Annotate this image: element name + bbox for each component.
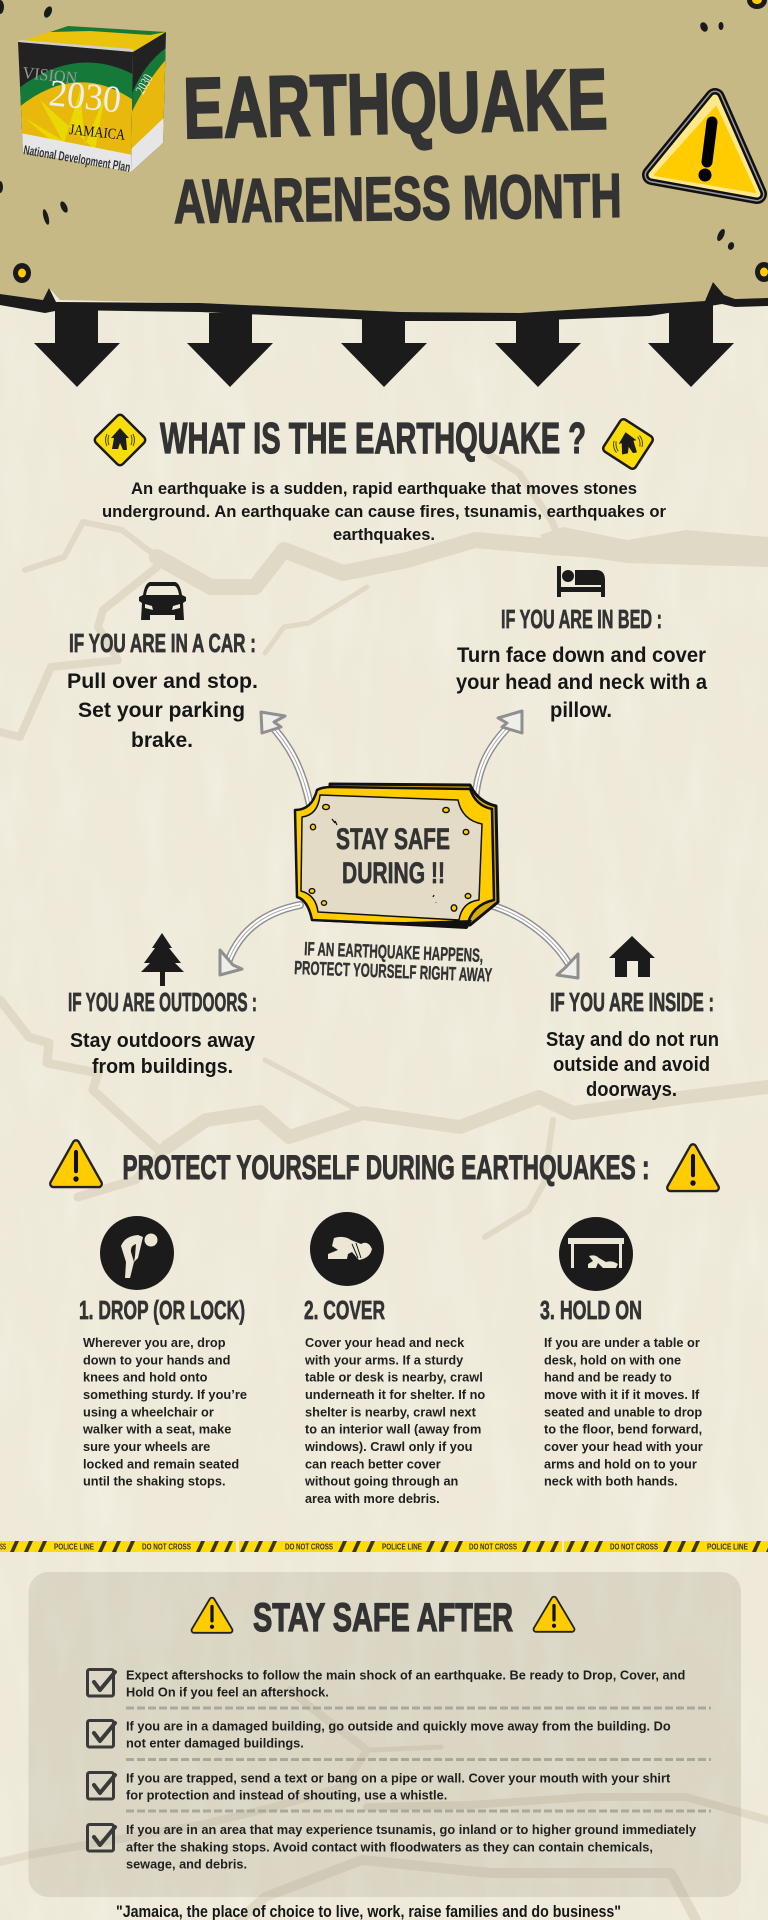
panel: outdoors <box>68 933 257 1078</box>
panel: step 1 drop: locked and remain seated <box>83 1456 239 1471</box>
icon: warning right <box>536 1599 572 1629</box>
panel: step 3 hold on <box>540 1217 703 1489</box>
panel: in a car <box>67 582 258 752</box>
police tape: DO NOT CROSS <box>610 1542 659 1552</box>
icon: warning left <box>53 1144 99 1184</box>
panel: step 1 drop: until the shaking stops. <box>83 1474 226 1489</box>
intro paragraph <box>102 480 667 544</box>
panel: step 3 hold on: 3. HOLD ON <box>540 1295 642 1325</box>
caption under sign <box>294 939 493 987</box>
panel: step 2 cover: windows). Crawl only if you <box>304 1439 472 1454</box>
Vision 2030 Jamaica logo cube: 2030 <box>133 72 156 97</box>
panel: step 2 cover: area with more debris. <box>305 1491 440 1506</box>
sign: stay safe during <box>295 784 498 929</box>
checklist: sewage, and debris. <box>126 1857 247 1872</box>
panel: step 2 cover: with your arms. If a sturdy <box>304 1352 464 1367</box>
police tape: POLICE LINE <box>54 1542 95 1552</box>
police tape: POLICE LINE <box>707 1542 749 1552</box>
checklist: If you are in an area that may experience tsunamis, go inland or to higher ground immediately <box>126 1822 697 1837</box>
police tape: POLICE LINE <box>382 1542 423 1552</box>
icon: car <box>139 582 186 620</box>
panel: in bed: IF YOU ARE IN BED : <box>501 604 662 634</box>
caption under sign: PROTECT YOURSELF RIGHT AWAY <box>294 958 493 987</box>
checklist: If you are in a damaged building, go outside and quickly move away from the building. Do <box>126 1718 671 1733</box>
title <box>173 51 622 237</box>
panel: step 3 hold on: move with it if it moves. If <box>544 1387 700 1402</box>
heading: stay safe after: STAY SAFE AFTER <box>253 1596 513 1640</box>
panel: in a car: IF YOU ARE IN A CAR : <box>69 628 256 658</box>
panel: step 1 drop: 1. DROP (OR LOCK) <box>79 1295 245 1325</box>
panel: step 1 drop: knees and hold onto <box>83 1370 207 1385</box>
panel: step 3 hold on: arms and hold on to your <box>544 1456 697 1471</box>
panel: step 1 drop: using a wheelchair or <box>83 1404 214 1419</box>
panel: step 3 hold on: neck with both hands. <box>544 1474 678 1489</box>
checklist: Expect aftershocks to follow the main shock of an earthquake. Be ready to Drop, Cover, and <box>126 1667 685 1682</box>
icon: shaking house sign right <box>596 412 660 476</box>
Vision 2030 Jamaica logo cube: VISION <box>22 63 78 88</box>
checklist: not enter damaged buildings. <box>126 1736 304 1751</box>
panel: step 1 drop: walker with a seat, make <box>82 1422 231 1437</box>
panel: inside: Stay and do not run <box>546 1029 719 1051</box>
panel: step 2 cover: can reach better cover <box>305 1456 441 1471</box>
panel: in bed <box>456 566 707 722</box>
panel: step 2 cover: underneath it for shelter. If no <box>305 1387 485 1402</box>
panel: step 1 drop: sure your wheels are <box>83 1439 210 1454</box>
Vision 2030 Jamaica logo cube: JAMAICA <box>69 122 126 144</box>
panel: outdoors: IF YOU ARE OUTDOORS : <box>68 987 257 1017</box>
icon: drop <box>100 1216 174 1290</box>
icon: hold on <box>559 1217 633 1291</box>
intro paragraph: An earthquake is a sudden, rapid earthquake that moves stones <box>131 480 637 498</box>
torn black edge of banner <box>0 282 768 321</box>
panel: in a car: brake. <box>131 729 193 752</box>
panel: step 3 hold on: hand and be ready to <box>544 1370 672 1385</box>
banner specks and rivets <box>0 0 768 283</box>
arrow: down left <box>220 905 300 975</box>
panel: in bed: Turn face down and cover <box>457 644 706 667</box>
panel: in a car: Pull over and stop. <box>67 670 258 693</box>
police tape: DO NOT CROSS <box>285 1542 334 1552</box>
panel: outdoors: from buildings. <box>92 1056 233 1078</box>
icon: cover <box>310 1212 384 1286</box>
icon: big warning sign <box>652 98 757 194</box>
checklist: If you are trapped, send a text or bang on a pipe or wall. Cover your mouth with your shirt <box>126 1770 671 1785</box>
header banner <box>0 0 768 321</box>
icon: warning right <box>670 1148 716 1188</box>
panel: step 3 hold on: seated and unable to drop <box>544 1404 702 1419</box>
panel: inside: doorways. <box>586 1079 677 1101</box>
panel: step 2 cover: Cover your head and neck <box>305 1335 465 1350</box>
panel: step 1 drop: Wherever you are, drop <box>83 1335 226 1350</box>
panel: step 2 cover: without going through an <box>304 1474 458 1489</box>
arrow: up left <box>261 712 310 805</box>
police tape: DO NOT CROSS <box>142 1542 192 1552</box>
icon: warning left <box>194 1600 230 1630</box>
checklist: after the shaking stops. Avoid contact with floodwaters as they can contain chemicals, <box>126 1839 653 1854</box>
panel: step 3 hold on: desk, hold on with one <box>544 1352 681 1367</box>
panel: step 1 drop: something sturdy. If you’re <box>83 1387 247 1402</box>
arrow: down right <box>490 905 578 978</box>
caption under sign: IF AN EARTHQUAKE HAPPENS, <box>304 939 483 967</box>
police tape <box>0 1541 768 1552</box>
panel: step 3 hold on: cover your head with your <box>544 1439 703 1454</box>
panel: outdoors: Stay outdoors away <box>70 1030 256 1052</box>
sign: stay safe during: DURING !! <box>342 857 445 890</box>
panel: in bed: your head and neck with a <box>456 671 707 694</box>
panel: inside <box>546 936 719 1101</box>
panel: step 2 cover <box>304 1212 485 1506</box>
panel: inside: outside and avoid <box>553 1054 710 1076</box>
panel: step 1 drop: down to your hands and <box>83 1352 230 1367</box>
panel: step 3 hold on: to the floor, bend forward, <box>544 1422 702 1437</box>
panel: step 3 hold on: If you are under a table or <box>544 1335 700 1350</box>
checklist: Hold On if you feel an aftershock. <box>126 1685 329 1700</box>
panel: in bed: pillow. <box>550 699 612 722</box>
police tape: DO NOT CROSS <box>469 1542 518 1552</box>
intro paragraph: underground. An earthquake can cause fires, tsunamis, earthquakes or <box>102 503 667 521</box>
panel: step 2 cover: to an interior wall (away from <box>305 1422 481 1437</box>
arrow: up right <box>475 711 522 800</box>
icon: bed <box>557 566 605 597</box>
panel: step 1 drop <box>79 1216 247 1489</box>
background cracks <box>0 455 768 1920</box>
icon: shaking house sign left <box>93 413 147 467</box>
police tape: SS <box>0 1542 6 1552</box>
Vision 2030 Jamaica logo cube: 2030 <box>47 72 123 121</box>
icon: house <box>609 936 655 977</box>
panel: step 2 cover: table or desk is nearby, crawl <box>305 1370 483 1385</box>
Vision 2030 Jamaica logo cube: National Development Plan <box>23 142 132 175</box>
sign: stay safe during: STAY SAFE <box>336 823 450 856</box>
panel: stay safe after <box>28 1572 741 1897</box>
checklist: for protection and instead of shouting, use a whistle. <box>126 1788 447 1803</box>
panel: step 2 cover: 2. COVER <box>304 1295 385 1325</box>
intro paragraph: earthquakes. <box>333 526 435 544</box>
panel: step 2 cover: shelter is nearby, crawl next <box>305 1404 476 1419</box>
icon: tree <box>141 933 184 986</box>
Vision 2030 Jamaica logo cube <box>18 26 166 172</box>
row of down arrows <box>34 305 734 387</box>
panel: in a car: Set your parking <box>78 699 245 722</box>
checklist <box>88 1667 711 1872</box>
